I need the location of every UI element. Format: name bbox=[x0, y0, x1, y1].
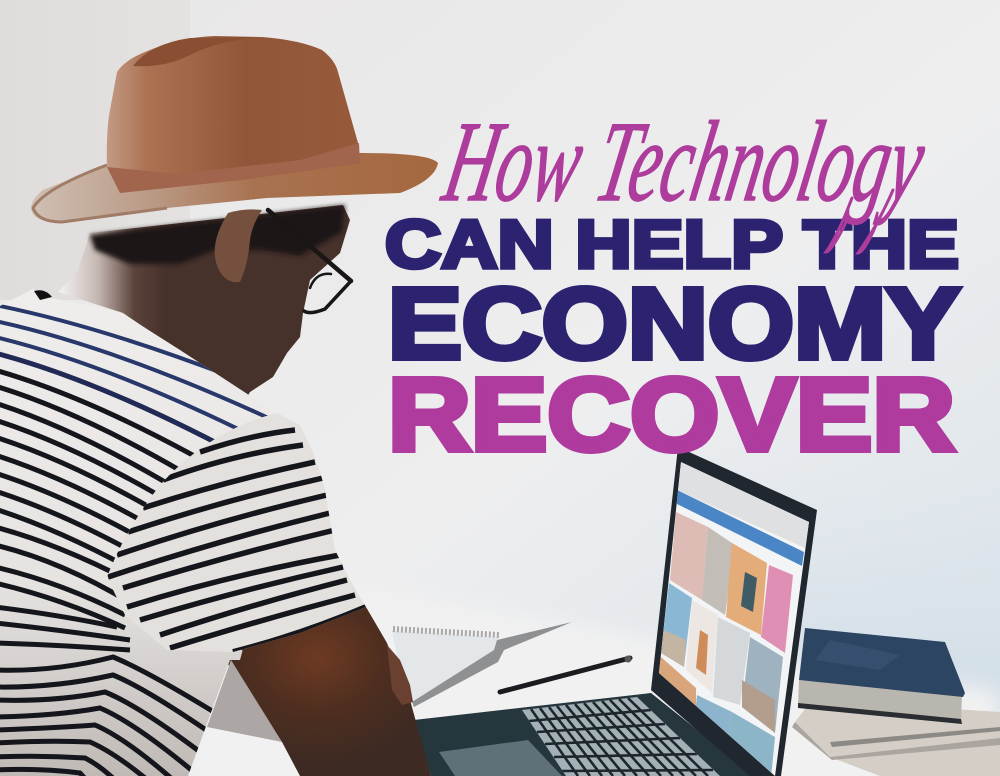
script flourishes bbox=[826, 190, 893, 253]
title line: RECOVER: RECOVER bbox=[388, 357, 955, 472]
hat brim bbox=[31, 150, 438, 223]
hat crown bbox=[107, 36, 360, 193]
arm bbox=[225, 607, 431, 776]
title line: ECONOMY: ECONOMY bbox=[388, 268, 960, 380]
shirt fold bbox=[207, 660, 282, 742]
glasses bbox=[268, 210, 351, 313]
hat crease bbox=[133, 37, 258, 66]
icon: brown fedora hat bbox=[31, 36, 438, 223]
laptop screen bezel bbox=[651, 447, 817, 776]
neck and head bbox=[58, 205, 350, 397]
hand fingers bbox=[387, 645, 413, 705]
icon: pencil bbox=[500, 656, 632, 692]
laptop base bbox=[414, 693, 755, 776]
man: person at desk bbox=[0, 205, 431, 776]
hair bbox=[90, 205, 345, 264]
hat band bbox=[107, 143, 360, 193]
icon: spiral notebook bbox=[392, 622, 572, 707]
laptop display bbox=[659, 462, 809, 776]
icon: stacked books bbox=[792, 628, 1000, 776]
ear bbox=[215, 209, 262, 282]
keyboard bbox=[522, 697, 720, 776]
hat brim rim bbox=[33, 165, 167, 222]
trackpad bbox=[439, 740, 562, 776]
laptop bbox=[414, 447, 820, 776]
title bbox=[385, 99, 960, 472]
striped shirt body bbox=[0, 289, 268, 776]
collar bbox=[34, 290, 52, 300]
title line: CAN HELP THE: CAN HELP THE bbox=[385, 206, 959, 282]
striped sleeve bbox=[108, 413, 366, 652]
